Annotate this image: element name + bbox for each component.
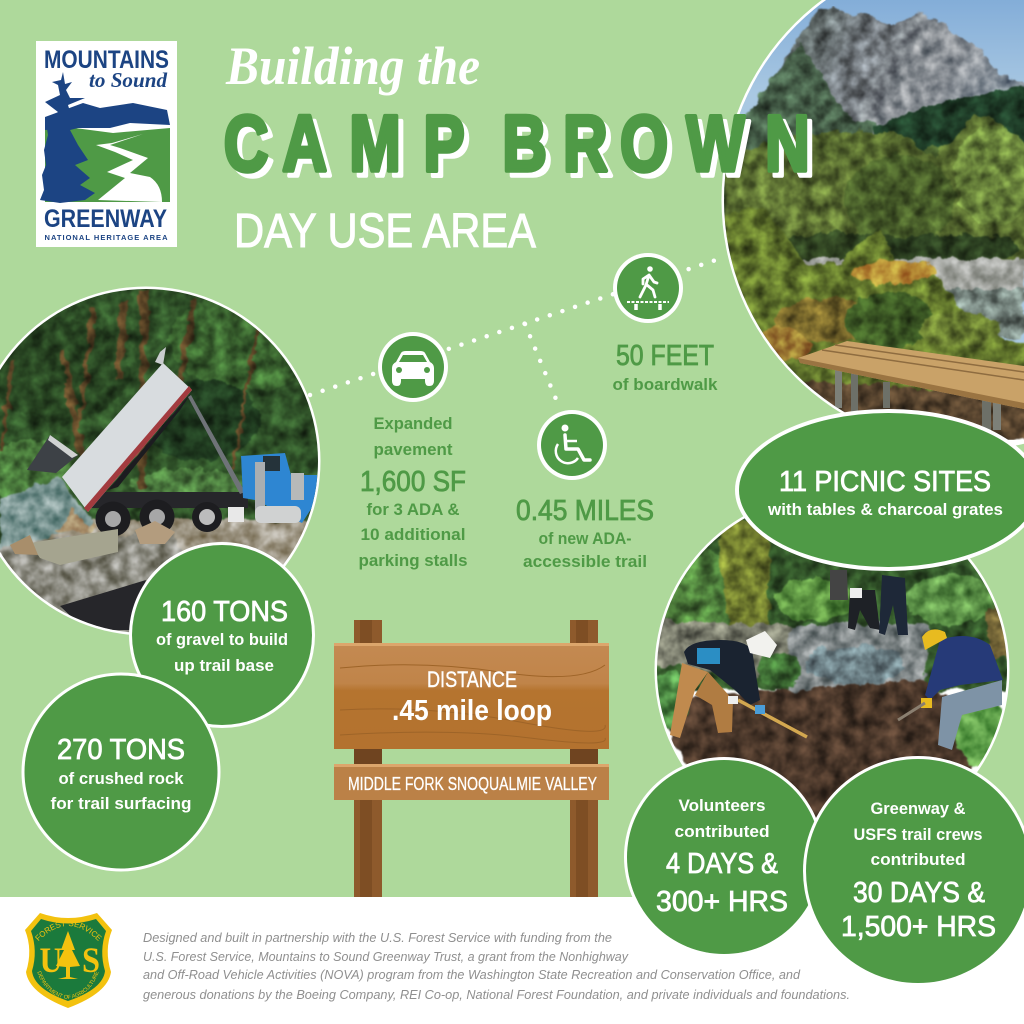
dotted route line [310, 257, 725, 404]
trail crews callout: contributed [870, 851, 966, 869]
stat: boardwalk: of boardwalk [612, 376, 718, 394]
footer credit text: generous donations by the Boeing Company, REI Co-op, National Forest Foundation, and private individuals and foundations. [143, 988, 850, 1002]
gravel callout: 160 tons: 160 TONS [161, 596, 288, 628]
trail crews callout [803, 756, 1024, 986]
stat: boardwalk [612, 340, 718, 394]
title: Day Use Area: DAY USE AREA [234, 205, 536, 258]
stat: new accessible trail: of new ADA- [538, 530, 632, 548]
trail crews callout: USFS trail crews [854, 826, 982, 844]
left volunteer [670, 631, 807, 738]
footer credit text [143, 931, 850, 1002]
dump truck [27, 347, 317, 536]
stat: expanded pavement: 10 additional [360, 526, 466, 544]
back workers [830, 570, 908, 635]
picnic sites callout: with tables & charcoal grates [767, 501, 1003, 519]
icon: boardwalk hiker [613, 253, 683, 323]
trail crews callout: Greenway & [870, 800, 966, 818]
crushed rock callout: 270 tons: 270 TONS [57, 734, 185, 766]
stat: expanded pavement [358, 415, 468, 570]
picnic sites callout: 11 PICNIC SITES [779, 466, 991, 498]
photo: mountain valley and picnic table [720, 0, 1024, 450]
stat: expanded pavement: 1,600 SF [360, 466, 466, 498]
logo: US Forest Service shield [25, 913, 112, 1008]
gravel callout: 160 tons: up trail base [174, 657, 274, 675]
stat: expanded pavement: Expanded [374, 415, 452, 433]
picnic sites callout [735, 409, 1024, 571]
volunteers callout [624, 757, 824, 957]
sign text: loop length: .45 mile loop [392, 695, 552, 727]
volunteers callout: contributed [674, 823, 770, 841]
picnic table [798, 341, 1024, 430]
logo: Mountains to Sound Greenway: to Sound [89, 68, 167, 92]
stat: expanded pavement: pavement [374, 441, 453, 459]
logo: US Forest Service shield: U [40, 940, 62, 980]
photo: trail crews building trail [654, 516, 1010, 818]
gravel callout: 160 tons: of gravel to build [156, 631, 288, 649]
photo: dump truck unloading gravel [0, 285, 330, 640]
logo: US Forest Service shield: FOREST SERVICE [35, 922, 102, 941]
gravel callout: 160 tons [129, 542, 315, 728]
sign text: distance: DISTANCE [427, 667, 517, 692]
stat: new accessible trail: 0.45 MILES [516, 495, 654, 527]
stat: new accessible trail [516, 495, 654, 571]
crushed rock callout: 270 tons: for trail surfacing [50, 795, 192, 813]
right worker [898, 629, 1003, 750]
stat: expanded pavement: parking stalls [358, 552, 468, 570]
footer credit text: U.S. Forest Service, Mountains to Sound Greenway Trust, a grant from the Nonhighway [143, 950, 629, 964]
logo: Mountains to Sound Greenway: NATIONAL HERITAGE AREA [44, 233, 168, 242]
logo: Mountains to Sound Greenway: MOUNTAINS [44, 46, 169, 74]
crushed rock callout: 270 tons: of crushed rock [58, 770, 184, 788]
wooden sign [334, 620, 609, 897]
logo: US Forest Service shield: S [82, 940, 100, 980]
title: Camp Brown: CAMP BROWN [229, 105, 815, 193]
crushed rock callout: 270 tons [22, 672, 220, 872]
icon: wheelchair [537, 410, 607, 480]
rocks and asphalt [10, 521, 175, 630]
title: Camp Brown: CAMP BROWN [224, 100, 810, 188]
stat: boardwalk: 50 FEET [616, 340, 714, 372]
footer band [0, 897, 1024, 1024]
icon: car [378, 332, 448, 402]
logo: US Forest Service shield: DEPARTMENT OF AGRICULTURE [37, 971, 99, 999]
volunteers callout: Volunteers [678, 797, 766, 815]
stat: expanded pavement: for 3 ADA & [366, 501, 460, 519]
trail crews callout: 30 DAYS & [853, 877, 985, 909]
footer credit text: Designed and built in partnership with the U.S. Forest Service with funding from the [143, 931, 612, 945]
stat: new accessible trail: accessible trail [523, 553, 647, 571]
footer credit text: and Off-Road Vehicle Activities (NOVA) program from the Washington State Recreation and Conservation Office, and [143, 968, 801, 982]
volunteers callout: 4 DAYS & [666, 848, 778, 880]
sign text: valley: MIDDLE FORK SNOQUALMIE VALLEY [348, 774, 597, 794]
logo: Mountains to Sound Greenway: GREENWAY [44, 205, 167, 233]
title: Building the: Building the [225, 36, 480, 96]
trail crews callout: 1,500+ HRS [841, 911, 996, 943]
volunteers callout: 300+ HRS [656, 886, 788, 918]
logo: Mountains to Sound Greenway [36, 41, 177, 247]
